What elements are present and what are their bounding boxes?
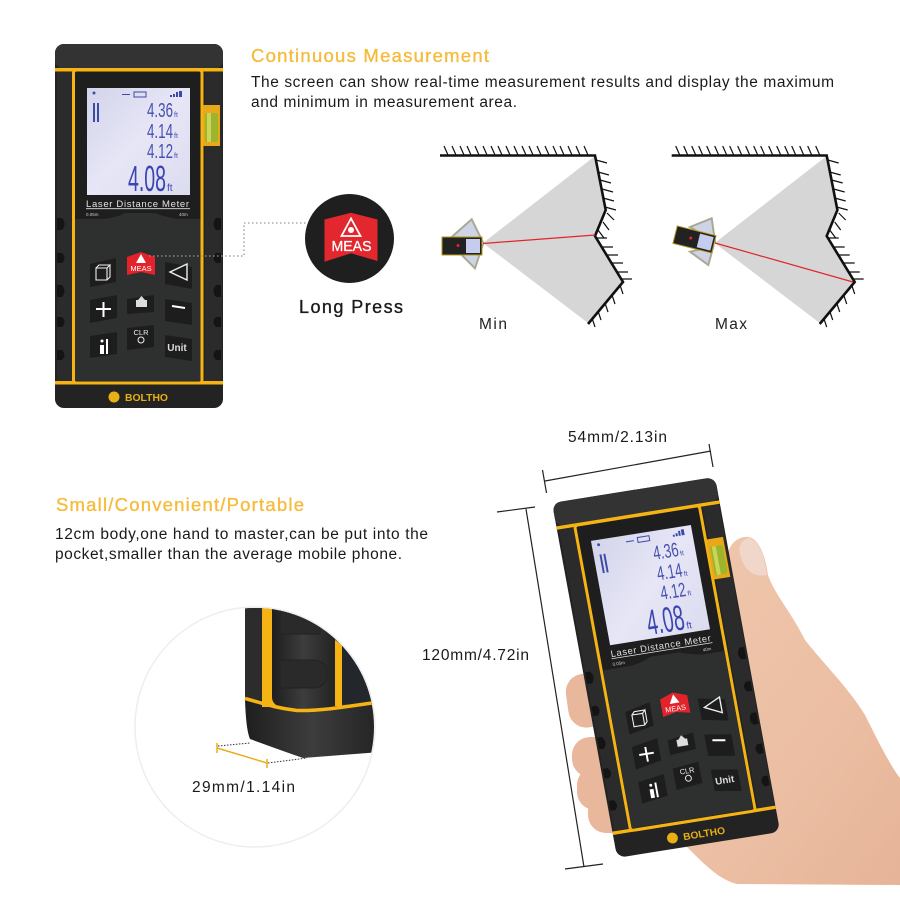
device: front view: ft xyxy=(174,112,178,119)
device: held in hand: ft xyxy=(683,571,688,578)
device: held in hand xyxy=(552,477,780,858)
device: front view: CLR xyxy=(133,328,149,337)
device: front view: 4.14 xyxy=(147,121,173,143)
panel: thickness close-up circle xyxy=(135,600,380,847)
text block: continuous measurement description xyxy=(251,74,834,111)
label: 54mm: 54mm/2.13in xyxy=(568,429,667,446)
device: held in hand: 4.36 xyxy=(651,539,680,565)
label: min: Min xyxy=(479,316,507,333)
label: long press: Long Press xyxy=(299,297,403,317)
heading: small convenient portable: Small/Convenient/Portable xyxy=(56,494,304,515)
device: front view: ft xyxy=(167,183,173,194)
device: front view: 4.36 xyxy=(147,100,173,122)
text block: continuous measurement description: and minimum in measurement area. xyxy=(251,94,517,111)
device: front view: ft xyxy=(174,153,178,160)
device: front view: Unit xyxy=(167,343,187,354)
device: front view: 40m xyxy=(179,212,188,217)
text block: portability description: pocket,smaller than the average mobile phone. xyxy=(55,546,402,563)
device: held in hand: CLR xyxy=(679,765,695,777)
label: 29mm: 29mm/1.14in xyxy=(192,779,295,796)
text block: continuous measurement description: The screen can show real-time measurement results and display the maximum xyxy=(251,74,834,91)
device: held in hand: 4.14 xyxy=(655,560,684,585)
device: held in hand: MEAS xyxy=(665,702,687,715)
device: held in hand: 4.08 xyxy=(643,597,687,643)
diagram: min measurement xyxy=(440,146,632,327)
illustration: hand xyxy=(563,537,900,885)
device: front view: Laser Distance Meter xyxy=(86,199,189,210)
text block: portability description xyxy=(55,526,428,563)
heading: continuous measurement: Continuous Measurement xyxy=(251,45,489,66)
connector: dotted leader to MEAS xyxy=(149,223,306,256)
dimension line: width xyxy=(542,444,713,493)
device: held in hand: 40m xyxy=(702,646,712,652)
label: max: Max xyxy=(715,316,747,333)
device: front view: MEAS xyxy=(130,264,152,273)
device: front view: 0.05m xyxy=(86,212,99,217)
icon: MEAS button callout xyxy=(305,194,394,283)
dimension line: height xyxy=(497,507,603,869)
label: 120mm: 120mm/4.72in xyxy=(422,647,529,664)
device: held in hand: Unit xyxy=(714,774,736,788)
device: held in hand: ft xyxy=(680,550,685,558)
device: held in hand: 4.12 xyxy=(659,579,688,605)
device: held in hand: Laser Distance Meter xyxy=(610,633,712,659)
device: held in hand: BOLTHO xyxy=(682,826,726,843)
device: front view: 4.08 xyxy=(128,158,166,199)
device: front view: 4.12 xyxy=(147,141,173,163)
device: held in hand: ft xyxy=(687,590,692,598)
icon: MEAS button callout: MEAS xyxy=(332,238,372,255)
device: held in hand: ft xyxy=(686,620,693,632)
dimension line: depth xyxy=(217,743,307,768)
text block: portability description: 12cm body,one hand to master,can be put into the xyxy=(55,526,428,543)
device: front view: BOLTHO xyxy=(125,393,168,404)
diagram: max measurement xyxy=(672,146,864,327)
device: held in hand: 0.05m xyxy=(612,660,625,667)
device: front view: ft xyxy=(174,133,178,140)
device: front view xyxy=(55,44,223,408)
